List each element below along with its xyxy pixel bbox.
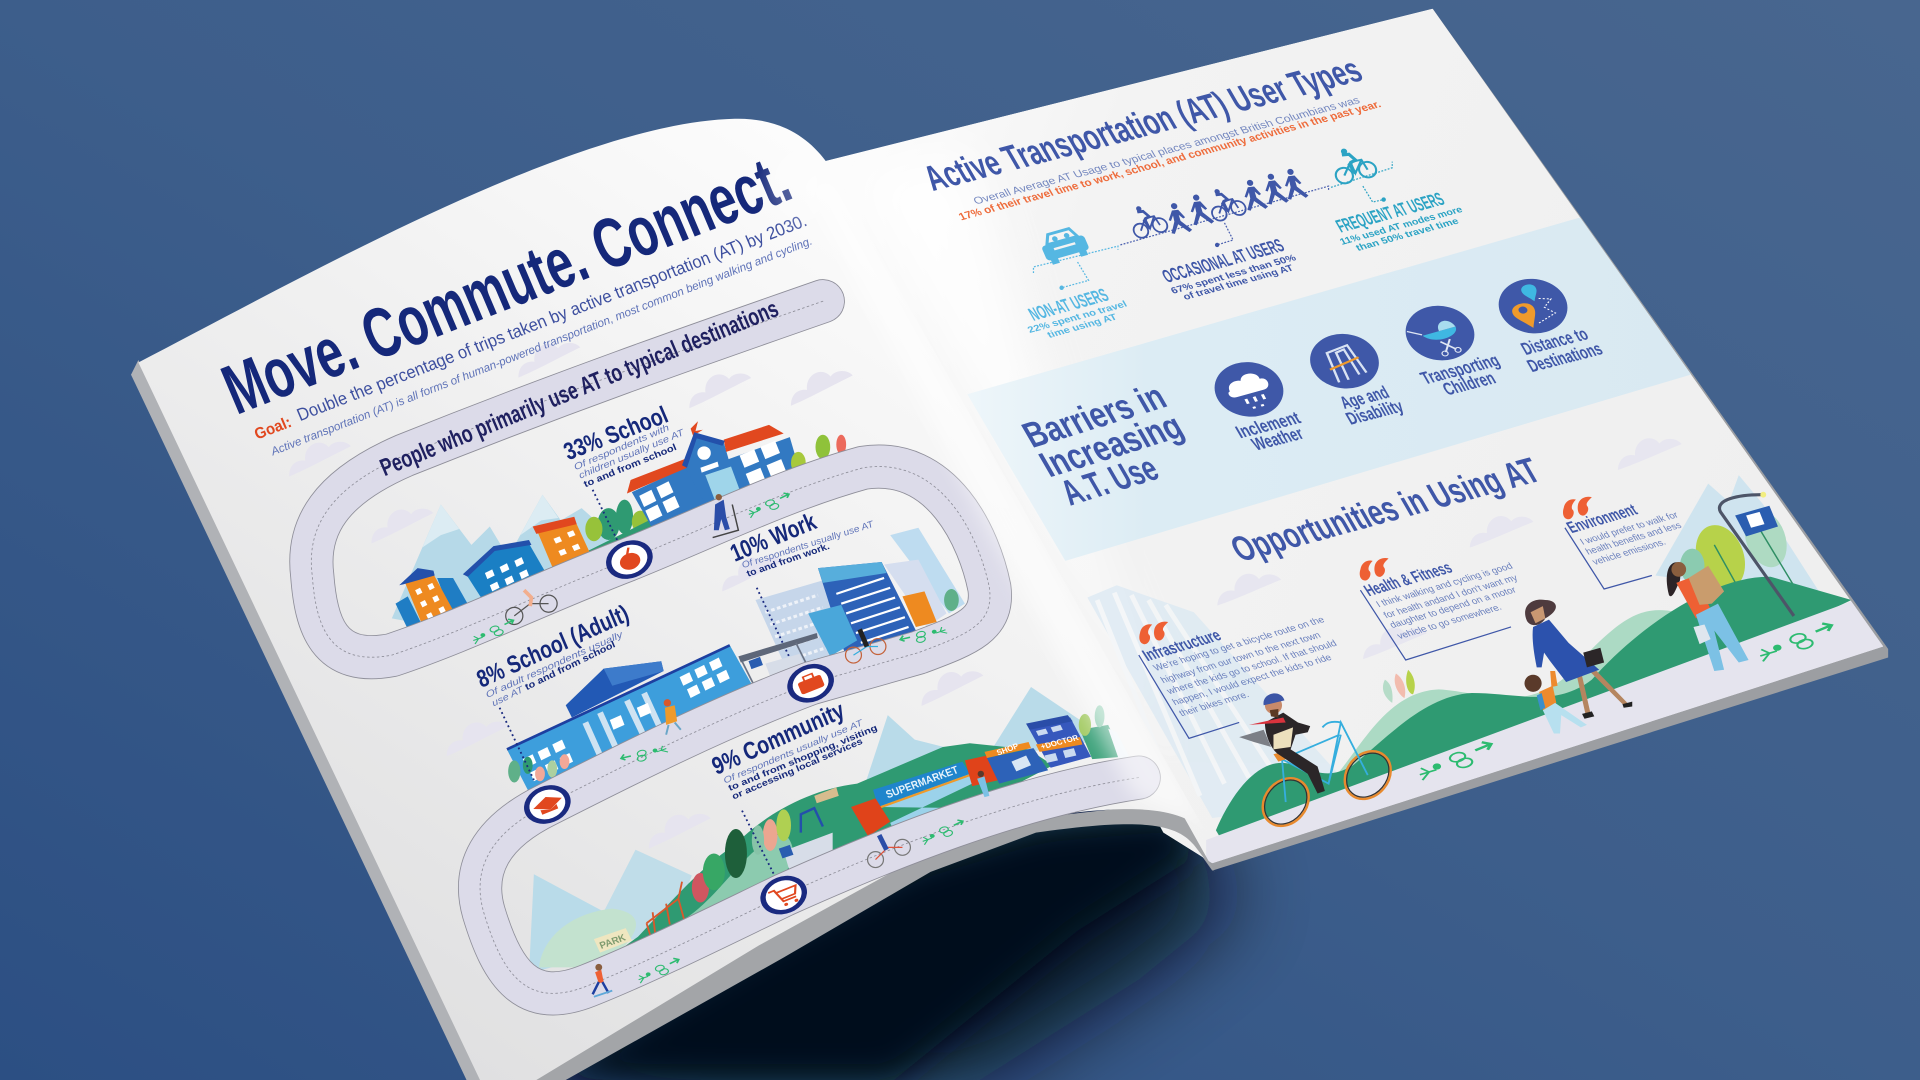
- bus stop: [784, 833, 833, 872]
- left page paper stack: [131, 360, 482, 1080]
- dotted leader: [500, 708, 534, 780]
- definition: Active transportation (AT) is all forms of human-powered transportation, most common being walking and cycling.: [268, 235, 814, 459]
- main tower: [818, 562, 916, 661]
- small trees: [508, 754, 569, 782]
- body text: [1152, 615, 1339, 719]
- park sign: PARK: [598, 932, 628, 952]
- supermarket: [851, 756, 999, 845]
- body text: daughter to depend on a motor: [1388, 585, 1519, 631]
- commuter cyclist: [846, 629, 886, 663]
- background illustration: tower: [1087, 585, 1347, 818]
- slide: [801, 808, 823, 833]
- sidewalk: [1206, 601, 1892, 872]
- quote mark: [1563, 497, 1592, 519]
- body text: [1578, 510, 1684, 567]
- body text: their bikes more.: [1177, 690, 1251, 719]
- cyclist 2: [1211, 189, 1247, 222]
- barrier labels: Disability: [1343, 397, 1408, 429]
- quote: environment: [1563, 497, 1684, 589]
- title end highlight: [765, 141, 839, 227]
- fold highlight: [802, 171, 1206, 827]
- icon: stroller: [1406, 306, 1474, 360]
- stat: 8% school adult: [473, 600, 633, 708]
- walker 3: [1244, 180, 1268, 211]
- columns: [585, 693, 665, 769]
- bench: [814, 787, 839, 803]
- icon: inclement weather: [1214, 362, 1284, 417]
- illustration: bus stop: [1719, 492, 1794, 616]
- body text: I would prefer to walk for: [1578, 510, 1681, 547]
- pediment: [566, 661, 664, 718]
- swing set: [647, 882, 684, 943]
- road: [311, 301, 1139, 993]
- clouds: [1211, 429, 1683, 659]
- heading: opportunities: Opportunities in Using AT: [1224, 451, 1547, 570]
- grid building windows: [765, 595, 838, 661]
- dotted leader: [593, 490, 617, 540]
- orange block: [902, 591, 937, 627]
- far tower: [890, 528, 965, 613]
- trees: [692, 809, 791, 902]
- goal statement: Double the percentage of trips taken by active transportation (AT) by 2030.: [294, 210, 810, 425]
- label: occasional users: OCCASIONAL AT USERS: [1158, 235, 1288, 287]
- body text: where the kids go to school. If that should: [1164, 639, 1339, 697]
- roof line: [507, 645, 730, 749]
- community cyclist: [868, 835, 910, 868]
- heading: barriers: Increasing: [1033, 407, 1191, 485]
- building body: [507, 645, 752, 792]
- barrier labels: Inclement: [1232, 408, 1305, 443]
- school centre and right wing: [684, 435, 798, 508]
- pale path: [686, 833, 793, 918]
- marker: apple: [600, 534, 659, 586]
- bracket: [1139, 655, 1239, 738]
- light bush: [539, 909, 636, 967]
- barrier labels: Age and: [1336, 383, 1393, 413]
- stat: 8% school adult: Of adult respondents usually: [484, 629, 626, 700]
- icon: occasional users row: [1128, 167, 1309, 238]
- light green hills: [1340, 610, 1672, 772]
- left page sheet: [138, 119, 1206, 1080]
- pedestrian and cycling markings: [1414, 621, 1838, 780]
- stat: 9% community: 9% Community: [708, 697, 849, 781]
- heading: barriers: [1021, 388, 1186, 506]
- background illustration: mountains: [1656, 475, 1818, 590]
- stat: 33% school: to and from school: [582, 442, 678, 489]
- connector dots: [1059, 197, 1386, 290]
- body text: happen, I would expect the kids to ride: [1170, 653, 1334, 708]
- green walk and bike markings: [469, 492, 967, 983]
- shop: [984, 741, 1048, 784]
- walker 5: [1285, 168, 1308, 200]
- illustration: child: [1524, 671, 1587, 733]
- stat: 9% community: to and from shopping, visiting: [727, 722, 879, 793]
- stat: 33% school: [560, 402, 687, 489]
- cyclist with child: [506, 590, 557, 624]
- label: frequent users: FREQUENT AT USERS: [1332, 189, 1448, 237]
- book shadow: [520, 814, 1237, 1080]
- label: non-AT users: 22% spent no travel: [1026, 299, 1129, 336]
- label: non-AT users: time using AT: [1045, 312, 1120, 341]
- windows: [523, 658, 730, 781]
- pale block: [884, 560, 947, 627]
- user type scale line: [1033, 162, 1392, 288]
- icon: age and disability walker: [1310, 334, 1379, 388]
- dark green hills: [1216, 577, 1851, 845]
- heading: barriers: A.T. Use: [1054, 449, 1166, 514]
- label: frequent users: than 50% travel time: [1354, 216, 1461, 254]
- school left wing: [632, 467, 708, 529]
- label: occasional users: [1162, 239, 1296, 300]
- background trees: [1079, 705, 1129, 760]
- barrier labels: Children: [1439, 369, 1500, 400]
- doctor office: +DOCTOR: [1039, 733, 1080, 751]
- heading: Infrastructure: [1139, 626, 1225, 665]
- stat: 8% school adult: 8% School (Adult): [473, 600, 633, 694]
- heading: barriers: Barriers in: [1016, 377, 1174, 456]
- body text: health benefits and less: [1584, 521, 1684, 557]
- quote: infrastructure: [1139, 615, 1339, 738]
- body text: I think walking and cycling is good: [1374, 561, 1515, 610]
- barrier labels: Distance to: [1518, 325, 1592, 359]
- stat: 8% school adult: use AT to and from school: [490, 639, 617, 708]
- quote mark: [1360, 558, 1389, 581]
- marker: shopping cart: [754, 869, 813, 921]
- panel: left page: [138, 119, 1206, 1080]
- blue house: [463, 540, 547, 607]
- body text: vehicle to go somewhere.: [1395, 603, 1504, 642]
- icon: distance pins: [1498, 278, 1568, 334]
- highlighted statistic: 17% of their travel time to work, school, and community activities in the past year.: [957, 99, 1383, 223]
- bus shelter: [738, 633, 818, 688]
- small trees: [576, 500, 661, 576]
- stat: 10% work: Of respondents usually use AT: [740, 519, 876, 570]
- mountains: [392, 495, 637, 637]
- bus stop sign: [779, 845, 793, 858]
- tower roof: [818, 562, 887, 583]
- barrier labels: Transporting: [1417, 351, 1504, 389]
- stat: 33% school: children usually use AT: [577, 427, 687, 481]
- scooter rider: [713, 494, 738, 538]
- light blue block: [808, 605, 857, 656]
- marker: briefcase: [781, 657, 840, 709]
- barriers band: [967, 216, 1695, 561]
- barrier labels: Destinations: [1524, 340, 1607, 377]
- tree: [944, 589, 959, 611]
- walking student: [664, 699, 681, 735]
- stat: 9% community: Of respondents usually use AT: [722, 717, 865, 786]
- scene 1: town and school: [392, 421, 857, 639]
- dotted leader: [742, 811, 774, 874]
- orange house: [533, 517, 590, 576]
- mountain highlights: [422, 495, 558, 547]
- dotted leader: [757, 588, 796, 671]
- tower stripes: [836, 578, 909, 643]
- park trees: [791, 435, 857, 480]
- scene 2: downtown work: [756, 528, 965, 671]
- scene 3: adult school: [500, 633, 818, 792]
- heading: Environment: [1563, 500, 1641, 537]
- body text: [1374, 561, 1520, 642]
- stat: 33% school: 33% School: [560, 402, 672, 466]
- cyclist 1: [1132, 206, 1168, 239]
- walker 2: [1190, 194, 1214, 226]
- scene 4: community park and shops: [529, 687, 1129, 973]
- bracket: [1360, 590, 1511, 660]
- body text: highway from our town to the next town: [1159, 630, 1323, 686]
- school windows: [639, 441, 786, 522]
- stat: 10% work: 10% Work: [727, 508, 821, 568]
- walker 1: [1168, 203, 1192, 234]
- intro line: Overall Average AT Usage to typical places amongst British Columbians was: [971, 95, 1362, 207]
- supermarket: SUPERMARKET: [884, 764, 961, 801]
- stat: 10% work: to and from work.: [745, 541, 831, 579]
- shop: SHOP: [995, 741, 1021, 757]
- body text: We're hoping to get a bicycle route on the: [1152, 615, 1327, 674]
- right page paper stack: [1194, 9, 1888, 871]
- base line: [529, 684, 752, 792]
- stat: 33% school: Of respondents with: [572, 422, 671, 472]
- school tower roof: [682, 432, 725, 468]
- book shadow core: [539, 814, 1194, 1080]
- body text: for health andand I don't want my: [1382, 573, 1520, 621]
- park sign: [594, 928, 632, 953]
- panel: right page: [808, 9, 1892, 872]
- school red roofs: [627, 421, 784, 493]
- label: frequent users: [1334, 192, 1462, 251]
- grid building: [756, 580, 845, 671]
- illustration: woman with briefcase: [1525, 600, 1632, 719]
- gutter highlight: [850, 128, 1008, 384]
- doctor office: [1026, 715, 1123, 768]
- mountains: [529, 687, 1096, 973]
- skateboarder: [593, 964, 612, 997]
- school door: [705, 467, 740, 501]
- marker: graduation cap: [518, 778, 577, 831]
- trees in scene: [1383, 504, 1802, 703]
- heading: Health & Fitness: [1360, 558, 1456, 600]
- icon: frequent cyclist: [1334, 148, 1378, 184]
- label: frequent users: 11% used AT modes more: [1338, 205, 1465, 247]
- clouds: [281, 332, 985, 849]
- body text: vehicle emissions.: [1590, 537, 1668, 567]
- barrier labels: Weather: [1248, 424, 1308, 455]
- label: non-AT users: [1028, 288, 1127, 338]
- label: occasional users: of travel time using AT: [1181, 263, 1296, 303]
- right page sheet: [808, 9, 1883, 863]
- goal label: Goal:: [252, 414, 294, 443]
- school clock: [697, 446, 711, 460]
- green hill: [602, 743, 1053, 962]
- barrier labels: [1232, 325, 1607, 455]
- quote: health and fitness: [1360, 558, 1520, 660]
- illustration: woman with grocery bag: [1667, 562, 1749, 671]
- label: occasional users: 67% spent less than 50%: [1169, 253, 1299, 296]
- icon: car: [1042, 227, 1089, 265]
- banner heading: People who primarily use AT to typical destinations: [376, 295, 783, 482]
- illustration: cyclist: [1239, 693, 1400, 835]
- stat: 10% work: [727, 508, 876, 579]
- quote mark: [1139, 622, 1168, 644]
- left page lower edge stack: [527, 802, 1215, 1080]
- title: Move. Commute. Connect.: [212, 139, 802, 430]
- shopper: [977, 771, 989, 797]
- bracket: [1565, 528, 1652, 589]
- left houses: [396, 568, 469, 639]
- page highlights: [765, 141, 1206, 827]
- walker 4: [1266, 174, 1289, 204]
- stat: 9% community: or accessing local services: [730, 736, 864, 801]
- label: non-AT users: NON-AT USERS: [1025, 285, 1113, 325]
- road figures: [506, 494, 989, 997]
